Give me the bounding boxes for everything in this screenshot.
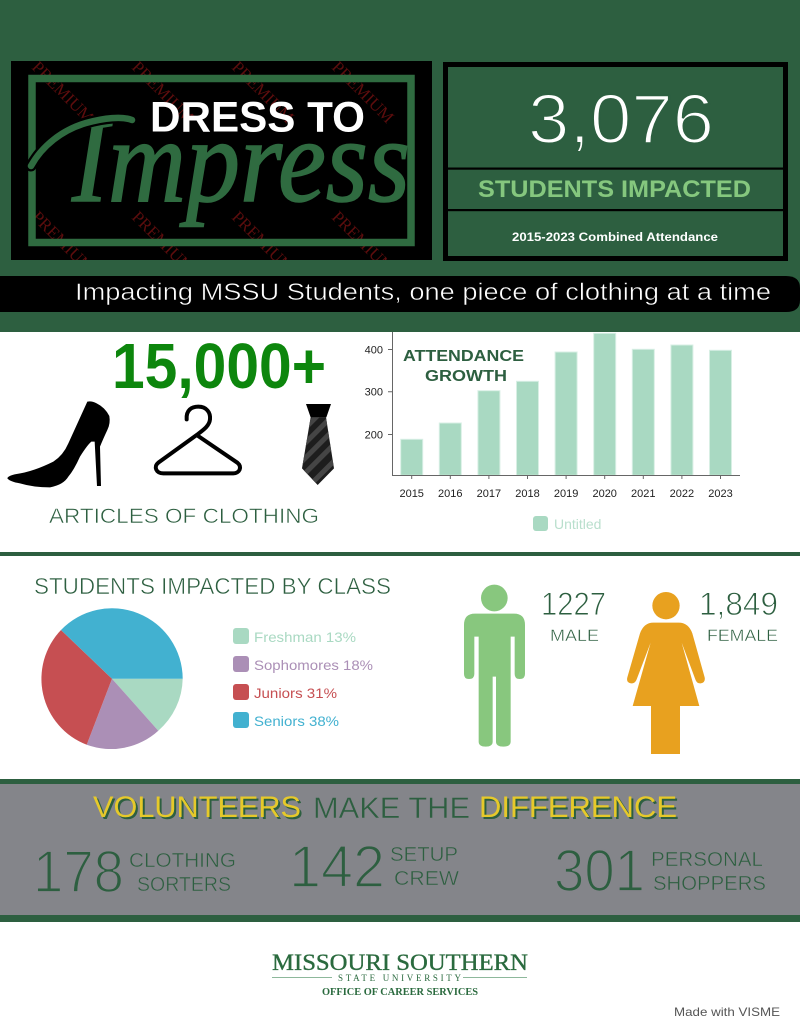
- stat: clothing sorters: 178: [33, 839, 124, 905]
- credit: Made with VISME: [674, 1005, 780, 1019]
- logo panel: Dress to Impress: PREMIUM: [228, 57, 298, 127]
- panel: students impacted: 3,076: [528, 80, 714, 158]
- bar chart: attendance growth: 300: [365, 386, 383, 398]
- panel: volunteers: [0, 779, 800, 922]
- bar chart: attendance growth: 2018: [515, 488, 540, 500]
- logo panel: Dress to Impress: Impress: [71, 94, 410, 227]
- icon: female figure: [627, 592, 705, 754]
- logo panel: Dress to Impress: PREMIUM: [228, 207, 298, 277]
- heading: students by class: STUDENTS IMPACTED BY CLASS: [34, 573, 391, 599]
- bar chart: attendance growth: 2015: [399, 488, 424, 500]
- pie legend: [233, 628, 373, 729]
- panel: students impacted: 2015-2023 Combined Attendance: [512, 232, 718, 244]
- stat: clothing sorters: [33, 839, 236, 905]
- logo panel: Dress to Impress: [11, 57, 432, 277]
- university logo: MISSOURI SOUTHERN: [272, 950, 528, 975]
- icon: clothes hanger: [156, 407, 240, 473]
- male count: MALE: [550, 626, 599, 645]
- logo panel: Dress to Impress: DRESS TO: [150, 94, 365, 142]
- bar chart: attendance growth: 2020: [592, 488, 617, 500]
- stat: clothing sorters: SORTERS: [137, 874, 231, 896]
- logo panel: Dress to Impress: PREMIUM: [128, 207, 198, 277]
- logo panel: Dress to Impress: PREMIUM: [28, 207, 98, 277]
- university logo: STATE UNIVERSITY: [338, 973, 462, 983]
- male count: 1227: [541, 586, 606, 622]
- bar chart: attendance growth: 2019: [554, 488, 578, 500]
- bar chart: attendance growth: 2022: [670, 488, 694, 500]
- bar chart: attendance growth: 2017: [477, 488, 501, 500]
- clothing count heading: 15,000+: [112, 330, 326, 402]
- logo panel: Dress to Impress: PREMIUM: [328, 207, 398, 277]
- female count: FEMALE: [707, 626, 778, 645]
- stat: clothing sorters: CLOTHING: [129, 850, 236, 872]
- volunteers heading: DIFFERENCE: [479, 791, 677, 824]
- bar chart: attendance growth: 2021: [631, 488, 656, 500]
- volunteers heading: DIFFERENCE: [481, 793, 679, 826]
- stat: personal shoppers: SHOPPERS: [653, 873, 766, 895]
- panel: students impacted: [446, 64, 786, 258]
- icon: male figure: [464, 585, 525, 747]
- header background band: [0, 0, 800, 332]
- bar chart: attendance growth: 200: [365, 430, 383, 442]
- stat: setup crew: [289, 834, 459, 900]
- stat: personal shoppers: [554, 838, 766, 904]
- bar chart: attendance growth: 2016: [438, 488, 463, 500]
- bar chart: attendance growth: 2023: [708, 488, 733, 500]
- university logo: [272, 950, 528, 998]
- icon: striped tie: [302, 404, 334, 485]
- chart title: attendance growth: ATTENDANCE: [403, 348, 524, 365]
- pie legend: Sophomores 18%: [254, 657, 373, 673]
- tagline banner: [0, 276, 800, 312]
- male count: [541, 586, 606, 645]
- bar chart: attendance growth: 400: [365, 344, 383, 356]
- stat: setup crew: SETUP: [390, 844, 458, 866]
- bar chart: attendance growth: Untitled: [554, 516, 601, 532]
- logo panel: Dress to Impress: PREMIUM: [28, 57, 98, 127]
- pie legend: Juniors 31%: [254, 685, 337, 701]
- pie legend: Freshman 13%: [254, 629, 356, 645]
- university logo: OFFICE OF CAREER SERVICES: [322, 987, 478, 998]
- pie chart: students by class: [41, 608, 183, 749]
- bar chart: attendance growth: [365, 332, 740, 532]
- logo panel: Dress to Impress: PREMIUM: [128, 57, 198, 127]
- icon: high heel shoe: [7, 401, 110, 487]
- logo panel: Dress to Impress: PREMIUM: [328, 57, 398, 127]
- volunteers heading: MAKE THE: [313, 792, 470, 825]
- pie legend: Seniors 38%: [254, 713, 339, 729]
- volunteers heading: [93, 791, 679, 826]
- tagline banner: Impacting MSSU Students, one piece of clothing at a time: [75, 279, 771, 306]
- volunteers heading: VOLUNTEERS: [93, 791, 301, 824]
- female count: [699, 586, 778, 645]
- panel: students impacted: STUDENTS IMPACTED: [478, 176, 751, 203]
- stat: setup crew: CREW: [394, 868, 459, 890]
- stat: personal shoppers: 301: [554, 838, 645, 904]
- volunteers heading: VOLUNTEERS: [95, 793, 303, 826]
- clothing caption: ARTICLES OF CLOTHING: [49, 505, 319, 528]
- stat: personal shoppers: PERSONAL: [651, 849, 763, 871]
- stat: setup crew: 142: [289, 834, 385, 900]
- chart title: attendance growth: [403, 348, 524, 385]
- divider band: [0, 552, 800, 556]
- female count: 1,849: [699, 586, 778, 622]
- chart title: attendance growth: GROWTH: [425, 368, 507, 385]
